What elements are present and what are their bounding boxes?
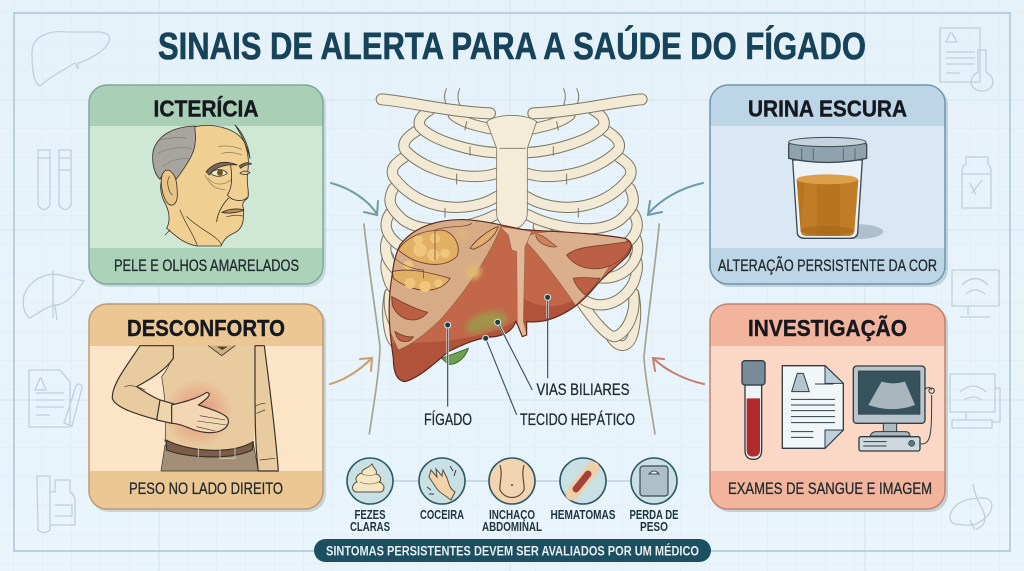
- icon: hematomas: [560, 458, 606, 504]
- caption: pele e olhos: PELE E OLHOS AMARELADOS: [114, 256, 299, 275]
- symptom labels: HEMATOMAS: [550, 508, 616, 522]
- symptom labels: INCHAÇO: [489, 508, 535, 522]
- gallbladder: [442, 348, 468, 364]
- bottom banner: SINTOMAS PERSISTENTES DEVEM SER AVALIADOS POR UM MÉDICO: [326, 544, 699, 558]
- caption: alteração persistente: ALTERAÇÃO PERSISTENTE DA COR: [718, 256, 937, 275]
- panel: desconforto: [89, 304, 326, 512]
- icon: tube and bottle: [37, 476, 75, 532]
- heading: icterícia: ICTERÍCIA: [154, 94, 258, 122]
- panel: urina escura: [710, 85, 948, 287]
- icon: bottle: [962, 157, 991, 208]
- right rib overlay: [527, 231, 628, 306]
- illustration: man with jaundice: [153, 125, 252, 246]
- label: fígado: FÍGADO: [424, 410, 472, 429]
- icon: liver swirl: [950, 484, 992, 530]
- illustration: blood tube, document, ultrasound: [742, 361, 934, 459]
- illustration: urine cup: [789, 137, 883, 239]
- title: SINAIS DE ALERTA PARA A SAÚDE DO FÍGADO: [158, 24, 866, 68]
- symptom labels: [350, 508, 678, 534]
- symptom labels: COCEIRA: [420, 508, 464, 522]
- illustration: man holding abdomen: [112, 346, 278, 471]
- illustration: rib cage and liver: [364, 88, 659, 434]
- arrow: urina to liver: [648, 183, 703, 215]
- symptom labels: PERDA DE: [630, 508, 678, 522]
- heading: desconforto: DESCONFORTO: [127, 315, 285, 341]
- icon: liver outline top left: [32, 32, 110, 86]
- body outline: [364, 224, 659, 434]
- clavicles: [382, 99, 490, 113]
- caption: exames: EXAMES DE SANGUE E IMAGEM: [728, 479, 932, 498]
- label: tecido hepático: TECIDO HEPÁTICO: [520, 410, 635, 429]
- icon: test tubes: [38, 150, 71, 210]
- symptom labels: FEZES: [354, 508, 386, 522]
- olive patch: [465, 311, 507, 333]
- icon: document and flask: [940, 28, 993, 91]
- symptom labels: PESO: [640, 520, 668, 534]
- heading: investigação: INVESTIGAÇÃO: [748, 314, 907, 341]
- label: vias biliares: VIAS BILIARES: [536, 381, 630, 399]
- symptom labels: ABDOMINAL: [482, 520, 542, 534]
- rib cage: [382, 88, 642, 346]
- icon: fezes claras: [347, 458, 393, 504]
- arrow: desconforto to liver: [330, 358, 372, 384]
- heading: urina escura: URINA ESCURA: [748, 96, 907, 122]
- icon: monitor 2: [950, 374, 1000, 428]
- symptom connector line: [393, 480, 631, 482]
- symptom icons row: [347, 458, 677, 504]
- icon: coceira: [419, 458, 465, 504]
- liver: [388, 219, 632, 382]
- arrow: investigação to liver: [653, 358, 704, 384]
- left rib overlay: [387, 217, 502, 350]
- sternum: [487, 115, 537, 229]
- callout lines: [448, 297, 548, 367]
- panel: investigação: [710, 304, 948, 512]
- icon: monitor 1: [952, 270, 999, 317]
- icon: inchaço abdominal: [489, 458, 535, 504]
- panel: icterícia: [89, 85, 326, 287]
- bottom banner: [314, 539, 711, 562]
- caption: peso no lado direito: PESO NO LADO DIREITO: [129, 479, 283, 498]
- falciform ligament: [500, 227, 532, 337]
- arrow: icterícia to liver: [331, 183, 378, 215]
- icon: perda de peso: [631, 458, 677, 504]
- symptom labels: CLARAS: [350, 520, 390, 534]
- icon: document and pen: [29, 370, 82, 427]
- icon: liver with vessels: [23, 270, 84, 320]
